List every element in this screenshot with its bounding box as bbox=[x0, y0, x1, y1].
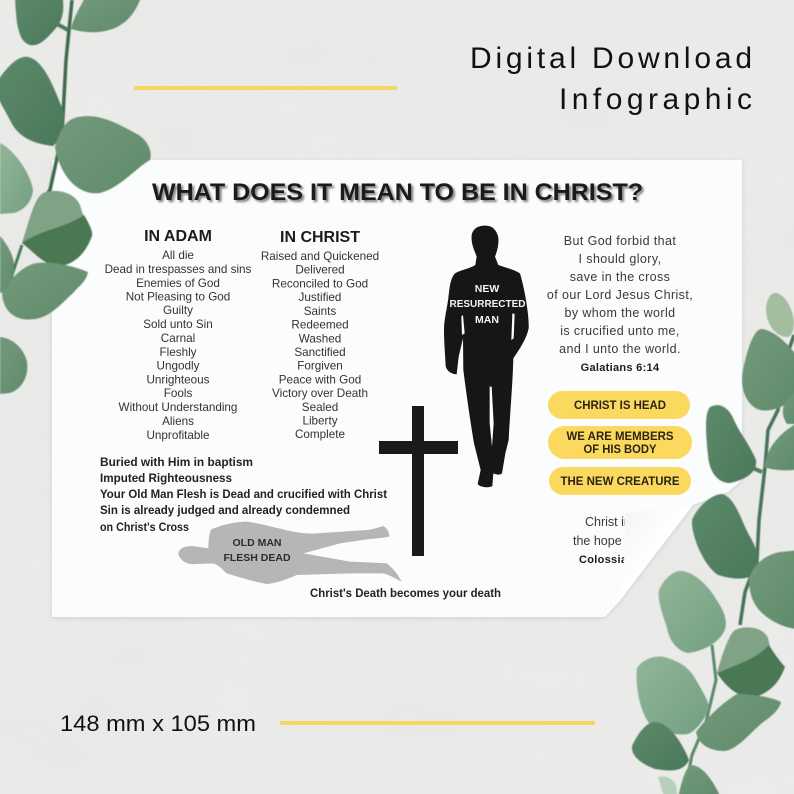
text block: buried with him: Imputed Righteousness bbox=[100, 471, 232, 485]
panel: infographic card bbox=[52, 160, 742, 618]
column: in adam: Fleshly bbox=[159, 346, 197, 359]
pill: christ is head: CHRIST IS HEAD bbox=[574, 398, 666, 412]
plant: right eucalyptus branch bbox=[632, 293, 794, 794]
column: in adam: Sold unto Sin bbox=[143, 318, 213, 331]
illustration: new resurrected man silhouette: RESURRECTED bbox=[450, 298, 526, 310]
heading: digital download infographic: Infographic bbox=[559, 83, 752, 116]
illustration: fallen old man shadow bbox=[178, 522, 402, 584]
column: in adam: Without Understanding bbox=[119, 401, 237, 414]
illustration: fallen old man shadow: OLD MAN bbox=[232, 537, 282, 549]
heading: digital download infographic bbox=[470, 42, 752, 116]
column: in adam: Carnal bbox=[161, 332, 195, 345]
verse: galatians 6:14: I should glory, bbox=[579, 252, 661, 266]
verse: galatians 6:14: Galatians 6:14 bbox=[581, 362, 660, 374]
verse: galatians 6:14: and I unto the world. bbox=[559, 342, 681, 356]
column: in adam: Ungodly bbox=[157, 360, 200, 372]
column: in adam: Unrighteous bbox=[146, 374, 210, 386]
column: in christ: Complete bbox=[295, 428, 345, 441]
verse: galatians 6:14: is crucified unto me, bbox=[560, 324, 680, 338]
caption: christ's death: Christ's Death becomes your death bbox=[310, 586, 501, 600]
pill: we are members of his body: OF HIS BODY bbox=[584, 442, 656, 456]
illustration: new resurrected man silhouette: MAN bbox=[475, 314, 499, 326]
column: in adam: Unprofitable bbox=[146, 429, 210, 442]
verse: colossians, covered by page curl: Christ in you, bbox=[585, 515, 658, 529]
illustration: new resurrected man silhouette bbox=[444, 226, 529, 487]
text block: buried with him: Sin is already judged and already condemned bbox=[100, 503, 350, 517]
pill: we are members of his body bbox=[548, 426, 692, 459]
pill: we are members of his body: WE ARE MEMBERS bbox=[566, 429, 674, 443]
text block: buried with him bbox=[100, 455, 387, 534]
column: in christ: Justified bbox=[299, 291, 341, 304]
column: in christ bbox=[261, 229, 379, 441]
pill: the new creature: THE NEW CREATURE bbox=[560, 474, 680, 488]
illustration: new resurrected man silhouette: NEW bbox=[475, 283, 499, 295]
column: in christ: Victory over Death bbox=[272, 387, 368, 400]
column: in christ: Liberty bbox=[302, 414, 338, 428]
plant: left eucalyptus branch bbox=[0, 0, 151, 394]
column: in christ: Sanctified bbox=[294, 346, 346, 359]
column: in adam: Fools bbox=[164, 387, 192, 400]
verse: colossians, covered by page curl: the hope of glory bbox=[573, 534, 667, 548]
size label: 148 mm x 105 mm bbox=[60, 711, 256, 736]
column: in christ: Saints bbox=[304, 305, 336, 318]
text block: buried with him: Your Old Man Flesh is Dead and crucified with Christ bbox=[100, 487, 387, 501]
column: in christ: Reconciled to God bbox=[272, 278, 368, 290]
verse: galatians 6:14: of our Lord Jesus Christ, bbox=[547, 288, 693, 302]
column: in christ: Peace with God bbox=[279, 374, 361, 386]
verse: galatians 6:14 bbox=[547, 234, 693, 374]
column: in christ: Forgiven bbox=[297, 360, 343, 372]
icon: cross bbox=[379, 406, 458, 556]
column: in christ: Raised and Quickened bbox=[261, 250, 379, 263]
illustration: fallen old man shadow: FLESH DEAD bbox=[223, 552, 291, 564]
pill: christ is head bbox=[548, 391, 690, 419]
text block: buried with him: Buried with Him in baptism bbox=[100, 455, 253, 469]
verse: colossians, covered by page curl bbox=[573, 516, 625, 563]
column: in christ: Washed bbox=[299, 332, 341, 346]
verse: galatians 6:14: save in the cross bbox=[570, 270, 670, 284]
column: in adam: Not Pleasing to God bbox=[126, 290, 230, 304]
verse: galatians 6:14: by whom the world bbox=[564, 306, 676, 320]
column: in adam: Enemies of God bbox=[136, 277, 220, 290]
heading: digital download infographic: Digital Download bbox=[470, 42, 752, 75]
pill: the new creature bbox=[549, 467, 691, 495]
column: in adam: Aliens bbox=[162, 415, 194, 428]
rule: top yellow line bbox=[134, 86, 397, 90]
column: in christ: Redeemed bbox=[291, 318, 349, 332]
column: in christ: IN CHRIST bbox=[280, 229, 360, 246]
column: in adam bbox=[105, 228, 252, 442]
rule: bottom yellow line bbox=[280, 721, 595, 725]
column: in adam: IN ADAM bbox=[144, 228, 212, 245]
title: WHAT DOES IT MEAN TO BE IN CHRIST? bbox=[152, 179, 643, 206]
text block: buried with him: on Christ's Cross bbox=[100, 520, 189, 534]
column: in adam: All die bbox=[162, 249, 194, 262]
column: in christ: Delivered bbox=[295, 264, 345, 276]
column: in christ: Sealed bbox=[302, 401, 338, 414]
page curl flap bbox=[618, 505, 693, 603]
column: in adam: Dead in trespasses and sins bbox=[105, 263, 252, 276]
column: in adam: Guilty bbox=[163, 304, 193, 317]
verse: colossians, covered by page curl: Colossians 1:27 bbox=[579, 554, 667, 566]
verse: galatians 6:14: But God forbid that bbox=[564, 234, 676, 248]
